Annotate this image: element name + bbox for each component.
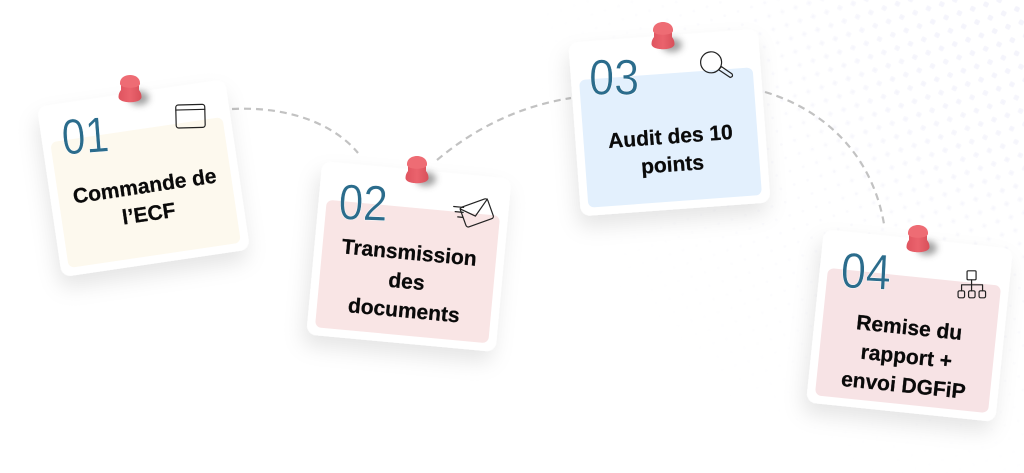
text: Audit des 10 points: points	[640, 151, 705, 179]
panel: card 04 colour block	[815, 268, 1001, 413]
text: Commande de l'ECF: Commande de	[71, 165, 218, 209]
connector 3 to 4	[765, 92, 884, 224]
card 02	[306, 161, 512, 352]
icon: browser window	[176, 104, 205, 128]
number 02: 02	[338, 174, 389, 232]
connector 2 to 3	[437, 98, 571, 160]
text: Transmission des documents: Transmission	[341, 235, 478, 271]
dotted background pattern	[804, 0, 1024, 214]
pin card 02	[406, 156, 436, 186]
connector 1 to 2	[232, 109, 358, 153]
icon: magnifier	[700, 50, 733, 80]
panel: card 01 colour block	[50, 117, 241, 268]
card 04	[806, 229, 1013, 422]
number 03: 03	[589, 49, 639, 105]
number 04: 04	[840, 242, 892, 301]
pin card 03	[652, 22, 682, 52]
text: Audit des 10 points: Audit des 10	[607, 121, 734, 153]
card 03	[568, 29, 771, 216]
pin card 04	[906, 225, 937, 255]
icon: sent envelope	[460, 198, 494, 228]
text: Commande de l'ECF: l’ECF	[121, 199, 177, 230]
panel: card 02 colour block	[315, 200, 500, 343]
text: Remise du rapport + envoi DGFiP: rapport +	[860, 341, 953, 373]
panel: card 03 colour block	[579, 67, 762, 208]
text: Remise du rapport + envoi DGFiP: Remise du	[855, 311, 963, 345]
text: Transmission des documents: des	[387, 269, 426, 295]
text: Remise du rapport + envoi DGFiP: envoi DGFiP	[840, 368, 967, 404]
icon: hierarchy tree	[958, 271, 986, 298]
card 01	[37, 79, 250, 277]
text: Transmission des documents: documents	[347, 294, 461, 327]
icon: envelope speed lines	[453, 206, 464, 217]
pin card 01	[118, 75, 149, 105]
number 01: 01	[60, 106, 111, 166]
